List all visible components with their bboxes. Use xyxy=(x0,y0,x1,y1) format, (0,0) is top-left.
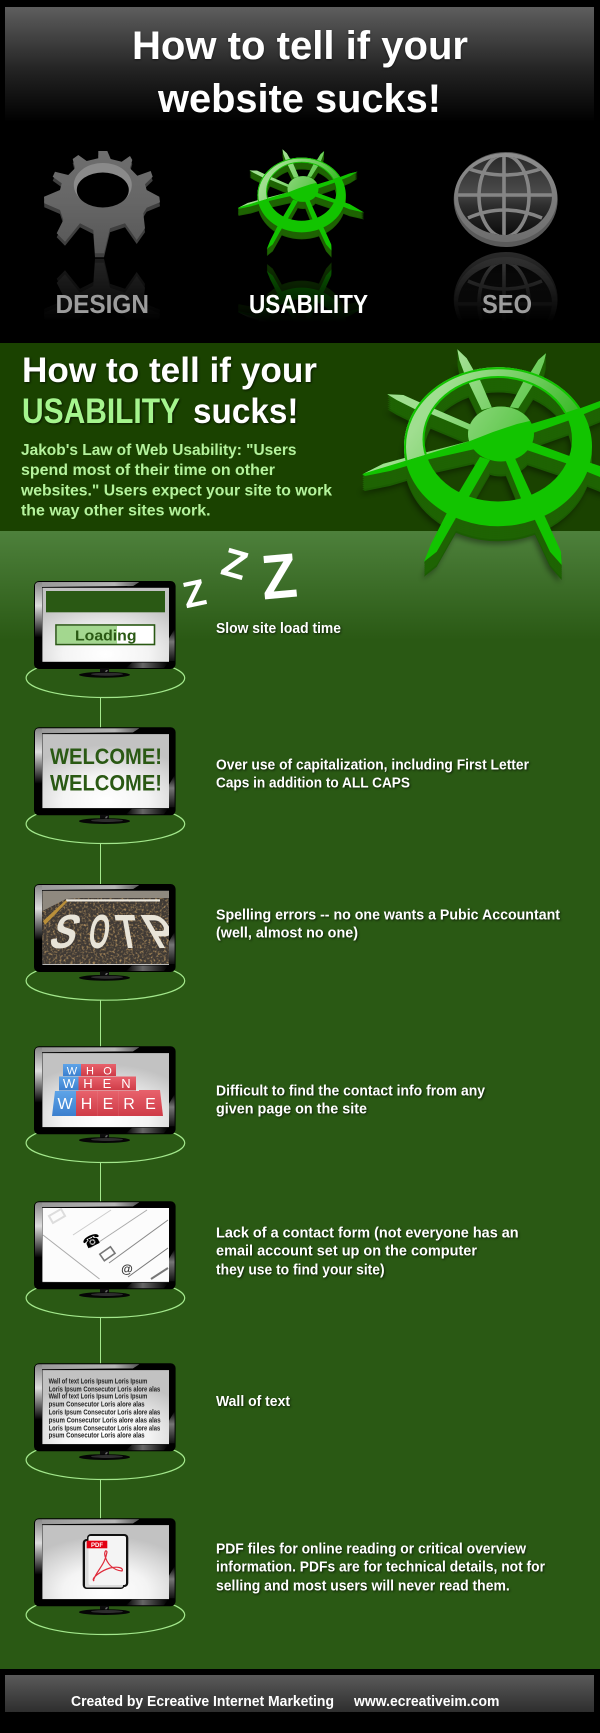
text block: Jakob's law: spend most of their time on other xyxy=(21,462,275,479)
item 4: contact info monitor with blocks: R xyxy=(123,1096,135,1113)
item 6: wall of text monitor xyxy=(34,1363,176,1460)
text: contact form: they use to find your site) xyxy=(216,1262,385,1278)
panel: header gradient xyxy=(5,7,594,122)
text block: Jakob's law: Jakob's Law of Web Usability: "Users xyxy=(21,442,297,459)
item 4: contact info monitor with blocks: W xyxy=(67,1066,78,1078)
text: contact form: email account set up on the computer xyxy=(216,1243,477,1259)
title xyxy=(132,24,468,121)
footer credit xyxy=(71,1694,499,1710)
text: slow load: Slow site load time xyxy=(216,621,341,637)
item 3: spelling monitor with road photo: O xyxy=(85,906,113,959)
title: website sucks! xyxy=(157,77,441,121)
text: contact info: Difficult to find the contact info from any xyxy=(216,1083,485,1099)
heading: usability: USABILITY xyxy=(22,392,180,431)
item 3: spelling monitor with road photo: P xyxy=(133,906,189,959)
text: capitalization: Caps in addition to ALL CAPS xyxy=(216,775,410,791)
text: PDF: information. PDFs are for technical details, not for xyxy=(216,1559,545,1575)
icon: large usability wheel xyxy=(360,349,600,583)
item 7: PDF monitor: PDF xyxy=(91,1543,103,1549)
text block: Jakob's law: the way other sites work. xyxy=(21,502,210,520)
text: capitalization xyxy=(216,757,529,791)
item 5: contact form monitor: @ xyxy=(121,1262,133,1276)
item 4: contact info monitor with blocks: E xyxy=(145,1096,156,1113)
text: contact form: Lack of a contact form (not everyone has an xyxy=(216,1225,519,1241)
label: usability: USABILITY xyxy=(249,289,368,319)
heading: usability xyxy=(22,351,317,431)
text: wall of text: Wall of text xyxy=(216,1394,290,1410)
item 4: contact info monitor with blocks: H xyxy=(81,1096,92,1113)
item 4: contact info monitor with blocks xyxy=(34,1046,176,1143)
item 3: spelling monitor with road photo: T xyxy=(112,904,143,958)
text: spelling xyxy=(216,907,560,941)
panel: list background xyxy=(0,531,600,1669)
item 6: wall of text monitor: psum Consecutor Loris alore alas xyxy=(49,1430,145,1439)
panel: footer band xyxy=(5,1675,594,1712)
icon: seo globe xyxy=(454,150,558,349)
text: PDF xyxy=(216,1541,545,1594)
item 4: contact info monitor with blocks: O xyxy=(103,1066,112,1078)
item 2: capitalization monitor: WELCOME! xyxy=(50,771,162,796)
item 2: capitalization monitor: WELCOME! xyxy=(50,744,162,769)
item 1: slow load monitor: Loading xyxy=(75,628,136,644)
item 7: PDF monitor xyxy=(34,1518,176,1615)
item 5: contact form monitor xyxy=(34,1201,176,1298)
item 4: contact info monitor with blocks: E xyxy=(103,1076,112,1091)
text: contact info: given page on the site xyxy=(216,1101,367,1117)
item 4: contact info monitor with blocks: H xyxy=(86,1066,94,1078)
connector lines xyxy=(100,697,102,1519)
label: design: DESIGN xyxy=(56,289,149,319)
icon: design gear xyxy=(44,151,160,365)
text: spelling: Spelling errors -- no one wants a Pubic Accountant xyxy=(216,907,560,923)
item 1: slow load monitor xyxy=(34,581,176,678)
heading: usability: sucks! xyxy=(193,392,298,431)
item 4: contact info monitor with blocks: W xyxy=(57,1096,73,1113)
item 4: contact info monitor with blocks: H xyxy=(83,1076,93,1091)
item 6: wall of text monitor: Wall of text Loris Ipsum Loris Ipsum xyxy=(49,1391,148,1400)
text: PDF: selling and most users will never read them. xyxy=(216,1578,510,1594)
text block: Jakob's law xyxy=(20,442,332,520)
item 5: contact form monitor: ☎ xyxy=(80,1229,104,1253)
icon: sleeping Z letters xyxy=(179,539,300,616)
title: How to tell if your xyxy=(132,24,468,68)
label: seo: SEO xyxy=(482,289,532,319)
item 4: contact info monitor with blocks: W xyxy=(63,1076,76,1091)
item 6: wall of text monitor: Loris Ipsum Consecutor Loris alore alas xyxy=(49,1423,160,1432)
text block: Jakob's law: websites." Users expect your site to work xyxy=(20,482,332,500)
text: contact form xyxy=(216,1225,519,1278)
item 2: capitalization monitor xyxy=(34,727,176,824)
item 4: contact info monitor with blocks: E xyxy=(103,1096,113,1113)
platform ellipses xyxy=(26,658,185,1634)
icon: sleeping Z letters: Z xyxy=(217,540,252,589)
item 6: wall of text monitor: Loris Ipsum Consecutor Loris alore alas xyxy=(49,1384,160,1393)
panel: usability heading band xyxy=(0,343,600,531)
item 6: wall of text monitor: psum Consecutor Loris alore alas alas xyxy=(49,1415,161,1424)
item 3: spelling monitor with road photo: S xyxy=(43,904,88,959)
icon: sleeping Z letters: Z xyxy=(179,571,210,616)
footer credit: Created by Ecreative Internet Marketing xyxy=(71,1694,334,1710)
item 3: spelling monitor with road photo xyxy=(34,884,189,981)
text: capitalization: Over use of capitalization, including First Letter xyxy=(216,757,529,773)
heading: usability: How to tell if your xyxy=(22,351,317,390)
item 4: contact info monitor with blocks: N xyxy=(121,1076,131,1091)
item 6: wall of text monitor: Wall of text Loris Ipsum Loris Ipsum xyxy=(49,1376,148,1385)
text: spelling: (well, almost no one) xyxy=(216,925,358,941)
item 6: wall of text monitor: psum Consecutor Loris alore alas xyxy=(49,1399,145,1408)
text: contact info xyxy=(216,1083,485,1117)
item 6: wall of text monitor: Loris Ipsum Consecutor Loris alore alas xyxy=(49,1407,160,1416)
icon: usability wheel xyxy=(238,149,364,371)
text: PDF: PDF files for online reading or critical overview xyxy=(216,1541,527,1557)
footer credit: www.ecreativeim.com xyxy=(353,1694,499,1710)
icon: sleeping Z letters: Z xyxy=(258,539,300,613)
